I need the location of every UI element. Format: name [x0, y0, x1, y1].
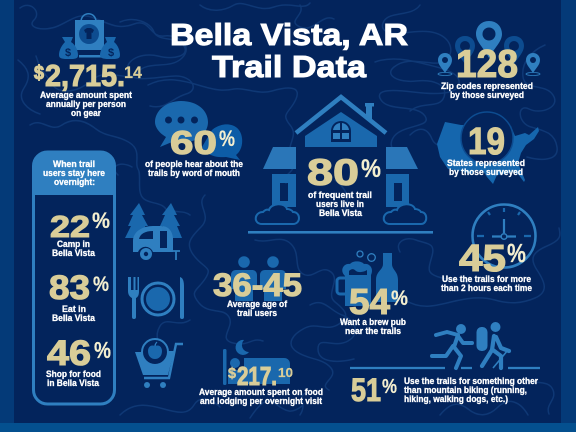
- stat: time on trails: than 2 hours each time: [441, 283, 532, 293]
- stat: shop: in Bella Vista: [47, 378, 100, 388]
- icon: beer mug and bottle: [337, 251, 398, 306]
- panel heading: users stay here: [43, 168, 105, 178]
- stat: gear spending: [34, 14, 143, 118]
- stat: word of mouth: of people hear about the: [145, 159, 243, 169]
- stat: gear spending: 2,715.: [45, 58, 125, 93]
- stat: camp: Camp in: [57, 239, 90, 249]
- panel: overnight stays: [34, 152, 114, 404]
- stat: camp: Bella Vista: [52, 248, 96, 258]
- stat: frequent users live in Bella Vista: of frequent trail: [308, 190, 372, 200]
- stat: time on trails: 45: [459, 238, 506, 280]
- stat: states: [437, 112, 539, 184]
- stat: eat: Bella Vista: [52, 313, 96, 323]
- stat: shop: %: [94, 337, 111, 363]
- icon: US map: [437, 112, 539, 184]
- stat: frequent users live in Bella Vista: Bella Vista: [319, 208, 363, 218]
- panel heading: [43, 159, 105, 187]
- stat: brew pub: [337, 251, 408, 336]
- icon: map pins: [438, 21, 540, 76]
- icon: bed and moon: [223, 340, 290, 385]
- stat: age: [213, 256, 302, 318]
- stat: food and lodging: [199, 340, 323, 406]
- stat: shop: [46, 334, 111, 388]
- title: Trail Data: [212, 49, 367, 84]
- title: [170, 17, 408, 84]
- stat: brew pub: Want a brew pub: [340, 317, 406, 327]
- stat: food and lodging: 10: [278, 365, 293, 380]
- stat: eat: [49, 269, 109, 323]
- icon: clock: [472, 204, 536, 268]
- stat: time on trails: [441, 204, 536, 293]
- stat: zip codes: by those surveyed: [450, 90, 524, 100]
- stat: frequent users live in Bella Vista: 80: [307, 152, 359, 193]
- stat: zip codes: [438, 21, 540, 100]
- stat: zip codes: Zip codes represented: [441, 81, 533, 91]
- panel heading: overnight:: [54, 177, 95, 187]
- stat: age: 36-45: [213, 267, 302, 303]
- stat: food and lodging: Average amount spent on food: [199, 387, 323, 397]
- stat: eat: %: [93, 273, 109, 296]
- stat: other trail uses: Use the trails for something other: [404, 376, 538, 386]
- icon: speech bubbles: [155, 101, 242, 160]
- stat: camp: %: [92, 208, 110, 233]
- stat: frequent users live in Bella Vista: users live in: [316, 199, 364, 209]
- icon: runner and hiker: [350, 322, 540, 368]
- stat: gear spending: 14: [124, 63, 143, 82]
- icon: shopping bag and money bags: $: [65, 47, 71, 59]
- stat: age: Average age of: [227, 299, 288, 309]
- stat: gear spending: $: [34, 63, 44, 84]
- stat: age: trail users: [237, 308, 277, 318]
- stat: states: 19: [468, 121, 505, 163]
- stat: food and lodging: and lodging per overnight visit: [200, 396, 322, 406]
- panel heading: When trail: [53, 159, 95, 169]
- stat: camp: 22: [50, 209, 90, 244]
- stat: camp: [50, 208, 110, 258]
- icon: two people: [231, 256, 286, 301]
- stat: other trail uses: [350, 322, 540, 408]
- stat: brew pub: %: [391, 287, 408, 310]
- stat: frequent users live in Bella Vista: %: [361, 155, 381, 183]
- stat: word of mouth: trails by word of mouth: [148, 168, 240, 178]
- stat: brew pub: 54: [349, 281, 390, 322]
- stat: eat: 83: [49, 269, 90, 307]
- stat: shop: 46: [47, 334, 91, 373]
- stat: zip codes: 128: [456, 43, 518, 86]
- icon: shopping bag and money bags: $: [108, 47, 114, 59]
- stat: gear spending: Average amount spent: [40, 90, 132, 100]
- stat: states: by those surveyed: [449, 167, 523, 177]
- stat: other trail uses: than mountain biking (running,: [404, 385, 527, 395]
- stat: other trail uses: hiking, walking dogs, etc.): [404, 394, 508, 404]
- stat: time on trails: %: [507, 238, 526, 268]
- stat: gear spending: annually per person: [46, 99, 126, 109]
- icon: fork and plate: [128, 277, 184, 319]
- icon: house: [248, 97, 433, 234]
- stat: frequent users live in Bella Vista: [248, 97, 433, 234]
- stat: other trail uses: 51: [351, 372, 381, 408]
- icon: shopping bag and money bags: [59, 14, 120, 59]
- stat: other trail uses: %: [382, 376, 397, 398]
- icon: shopping cart with apple: [135, 339, 183, 388]
- stat: shop: Shop for food: [46, 369, 101, 379]
- title: Bella Vista, AR: [170, 17, 408, 52]
- stat: word of mouth: %: [219, 126, 235, 151]
- stat: word of mouth: [145, 101, 243, 178]
- stat: gear spending: on gear: [71, 108, 101, 118]
- icon: camper and trees: [125, 203, 182, 260]
- stat: states: States represented: [447, 158, 525, 168]
- stat: time on trails: Use the trails for more: [442, 274, 531, 284]
- stat: brew pub: near the trails: [345, 326, 401, 336]
- stat: food and lodging: $: [228, 365, 237, 382]
- stat: eat: Eat in: [62, 304, 86, 314]
- stat: food and lodging: 217.: [237, 361, 277, 391]
- stat: word of mouth: 60: [170, 124, 217, 161]
